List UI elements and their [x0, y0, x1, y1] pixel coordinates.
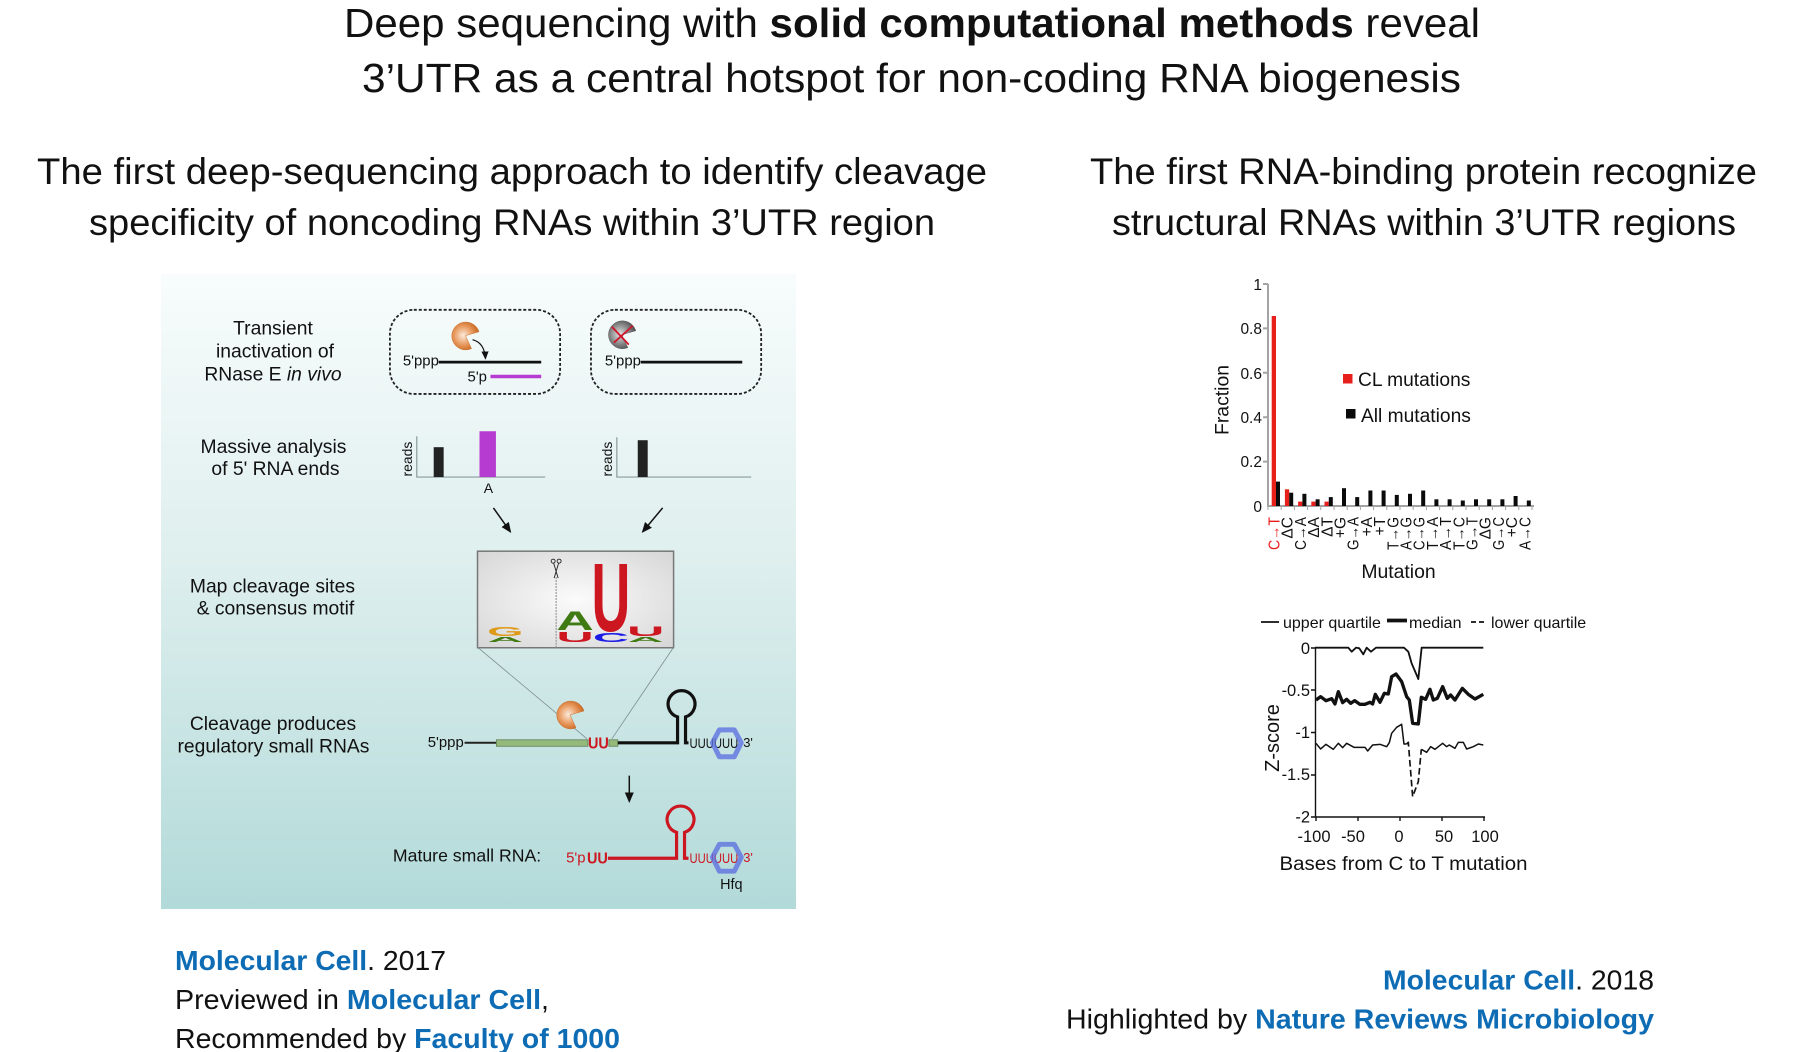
- x tick labels: G→T: [1464, 517, 1482, 550]
- x tick labels: +G: [1332, 517, 1350, 538]
- icon: scissors: [551, 559, 561, 578]
- x tick labels: T→C: [1451, 517, 1468, 550]
- heading: right column: The first RNA-binding protein recognize: [1090, 151, 1757, 192]
- legend: CL mutations: [1358, 370, 1470, 391]
- axes: [1311, 648, 1485, 821]
- heading: left column: specificity of noncoding RNAs within 3’UTR region: [89, 202, 935, 243]
- Hfq label: Hfq: [720, 877, 743, 893]
- x tick labels: [1266, 516, 1534, 550]
- x tick labels: +A: [1359, 516, 1376, 536]
- heading: right column: structural RNAs within 3’UTR regions: [1112, 202, 1736, 243]
- red bars: [1272, 316, 1329, 506]
- x tick labels: A→G: [1398, 517, 1416, 550]
- dashed box: RNase E inactive: [591, 310, 761, 394]
- line chart: z-score profile: Bases from C to T mutation: [1280, 854, 1528, 875]
- line chart: z-score profile: [1261, 615, 1586, 875]
- y tick labels: -0.5: [1282, 682, 1310, 700]
- x tick labels: [1297, 828, 1499, 846]
- bar chart: reads with active RNase E: A: [484, 480, 494, 496]
- icon: RNase E on precursor: [557, 701, 584, 729]
- citation: left: Previewed in Molecular Cell,: [175, 984, 549, 1015]
- arrow down: [628, 776, 630, 802]
- x tick labels: T→A: [1425, 516, 1442, 550]
- dashed box: RNase E active: [390, 310, 560, 394]
- y tick labels: -2: [1295, 808, 1310, 826]
- x tick labels: 50: [1435, 828, 1453, 846]
- motif sequence logo: A: [628, 635, 664, 643]
- citation: left: [175, 945, 620, 1052]
- step labels: & consensus motif: [197, 598, 355, 619]
- black bars: [1276, 482, 1531, 506]
- x tick labels: ΔC: [1280, 517, 1297, 539]
- bar chart: mutation fractions: [1212, 277, 1534, 583]
- y tick labels: -1: [1295, 724, 1310, 742]
- axis titles: Z-score: [1262, 704, 1284, 772]
- heading: left column: [37, 151, 987, 243]
- x tick labels: ΔA: [1306, 516, 1323, 538]
- step labels: Map cleavage sites: [190, 576, 355, 597]
- legend: All mutations: [1361, 406, 1471, 427]
- citation: right: [1066, 964, 1654, 1034]
- x tick labels: G→C: [1491, 517, 1508, 550]
- legend: [1261, 615, 1586, 632]
- y tick labels: 0.6: [1240, 366, 1262, 383]
- x tick labels: ΔT: [1319, 516, 1336, 537]
- heading: left column: The first deep-sequencing approach to identify cleavage: [37, 151, 987, 192]
- x tick labels: +T: [1372, 516, 1389, 536]
- title: [344, 0, 1480, 101]
- icon: Hfq ring lower: [712, 844, 741, 871]
- legend: median: [1409, 615, 1461, 632]
- y tick labels: 0.4: [1240, 410, 1262, 427]
- motif sequence logo: U: [591, 543, 630, 652]
- x tick labels: 100: [1471, 828, 1499, 846]
- axis titles: Fraction: [1212, 365, 1234, 435]
- x tick labels: -50: [1341, 828, 1365, 846]
- precursor RNA with cleavage site: 5'ppp: [428, 734, 464, 751]
- motif sequence logo: U: [627, 624, 664, 639]
- mature small RNA: UUUUUU: [690, 850, 738, 866]
- heading: right column: [1090, 151, 1757, 243]
- panel: cleavage workflow: [161, 274, 796, 909]
- x tick labels: C→T: [1266, 517, 1284, 550]
- y tick labels: 0.2: [1240, 454, 1262, 471]
- citation: right: Highlighted by Nature Reviews Microbiology: [1066, 1004, 1654, 1034]
- curves: [1315, 648, 1483, 797]
- step labels: RNase E in vivo: [204, 364, 342, 385]
- x tick labels: A→T: [1438, 517, 1455, 550]
- mature small RNA: [393, 806, 753, 868]
- y tick labels: 1: [1253, 277, 1262, 294]
- motif sequence logo: C: [593, 630, 629, 645]
- motif sequence logo: [478, 543, 674, 652]
- x tick labels: G→A: [1346, 516, 1363, 550]
- precursor RNA with cleavage site: [428, 691, 753, 753]
- legend: [1343, 370, 1471, 427]
- motif sequence logo: G: [487, 624, 524, 639]
- precursor RNA with cleavage site: UU: [588, 736, 609, 753]
- precursor RNA with cleavage site: 3': [743, 735, 753, 750]
- mature small RNA: UU: [587, 851, 608, 868]
- step labels: inactivation of: [216, 342, 335, 363]
- step labels: of 5' RNA ends: [211, 459, 340, 480]
- step labels: regulatory small RNAs: [177, 737, 369, 758]
- y tick labels: [1240, 277, 1262, 516]
- step labels: Transient: [233, 319, 313, 340]
- x tick labels: ΔG: [1478, 517, 1495, 539]
- legend: upper quartile: [1283, 615, 1381, 632]
- mature small RNA: Mature small RNA:: [393, 846, 541, 866]
- dashed box: RNase E active: 5'ppp: [403, 353, 439, 370]
- title: Deep sequencing with solid computational methods reveal: [344, 0, 1480, 46]
- x tick labels: C→G: [1412, 517, 1429, 550]
- dashed box: RNase E active: 5'p: [468, 368, 487, 385]
- axes: [1263, 284, 1534, 506]
- y tick labels: 0: [1253, 499, 1262, 516]
- x tick labels: C→A: [1293, 516, 1310, 550]
- x tick labels: T→G: [1385, 517, 1402, 550]
- bar chart: reads with inactive RNase E: reads: [599, 442, 615, 477]
- mature small RNA: 5'p: [566, 850, 586, 867]
- icon: Hfq ring upper: [712, 730, 741, 757]
- zoom guide lines: [478, 647, 674, 739]
- x tick labels: A→C: [1517, 517, 1534, 550]
- citation: right: Molecular Cell. 2018: [1383, 964, 1654, 996]
- bar chart: reads with inactive RNase E: [599, 437, 751, 477]
- citation: left: Molecular Cell. 2017: [175, 945, 446, 976]
- y tick labels: -1.5: [1282, 766, 1310, 784]
- y tick labels: [1282, 640, 1310, 826]
- step labels: Cleavage produces: [190, 714, 356, 735]
- motif sequence logo: U: [556, 629, 594, 645]
- precursor RNA with cleavage site: UUUUUU: [690, 735, 738, 751]
- y tick labels: 0: [1301, 640, 1310, 658]
- bar chart: reads with active RNase E: [399, 431, 545, 496]
- motif sequence logo: A: [556, 606, 594, 636]
- x tick labels: 0: [1394, 828, 1404, 846]
- x tick labels: +C: [1504, 517, 1521, 537]
- step labels: Massive analysis: [201, 437, 346, 458]
- y tick labels: 0.8: [1240, 321, 1262, 338]
- bar chart: reads with active RNase E: reads: [399, 442, 415, 477]
- title: 3’UTR as a central hotspot for non-coding RNA biogenesis: [362, 55, 1461, 101]
- mature small RNA: 3': [743, 850, 753, 865]
- axis titles: Mutation: [1361, 561, 1436, 583]
- x tick labels: -100: [1297, 828, 1331, 846]
- axis titles: [1212, 365, 1436, 583]
- dashed box: RNase E inactive: 5'ppp: [605, 353, 641, 370]
- arrows to motif: [493, 508, 663, 532]
- legend: lower quartile: [1491, 615, 1586, 632]
- motif sequence logo: A: [487, 635, 523, 643]
- step labels: [177, 319, 369, 758]
